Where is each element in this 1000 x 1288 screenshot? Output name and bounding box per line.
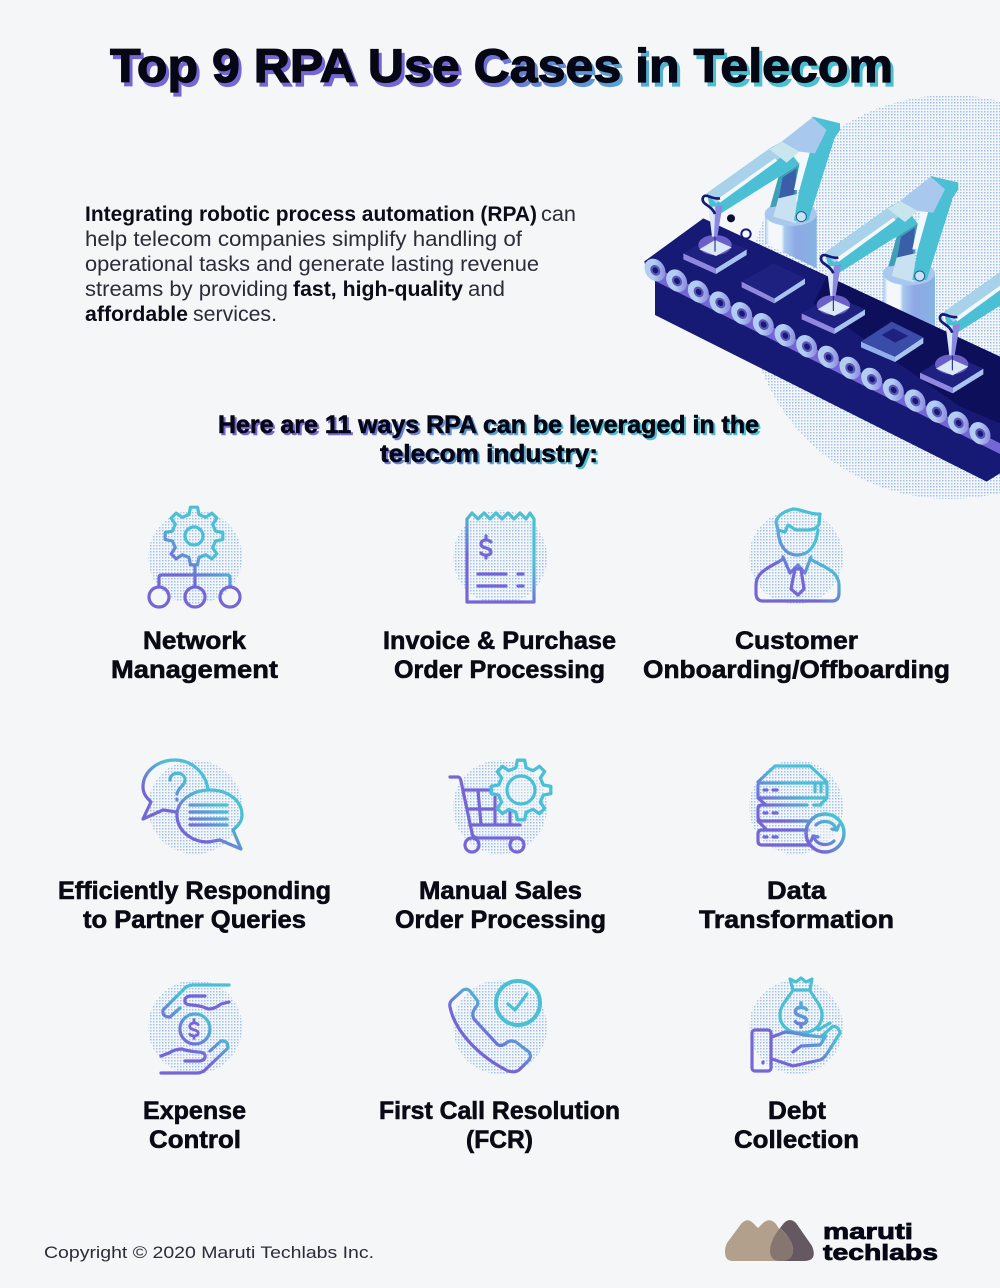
copyright: Copyright © 2020 Maruti Techlabs Inc. — [44, 1243, 374, 1262]
subheading — [218, 411, 761, 470]
label — [58, 877, 331, 934]
intro text block: can — [541, 203, 576, 226]
use case: Invoice and Purchase Order Processing — [383, 510, 616, 684]
label: Order Processing — [394, 656, 605, 684]
intro text block: Integrating robotic process automation (RPA) — [85, 203, 537, 226]
logo wordmark: techlabs — [823, 1240, 938, 1265]
title: Top 9 RPA Use Cases in Telecom — [110, 39, 893, 92]
intro text block: fast, high-quality — [293, 278, 463, 301]
logo: Maruti Techlabs — [725, 1219, 938, 1265]
label: Efficiently Responding — [58, 877, 331, 905]
illustration: robotic conveyor line — [640, 95, 1000, 499]
label — [734, 1097, 859, 1154]
title: Top 9 RPA Use Cases in Telecom — [113, 43, 896, 96]
icon: server stack — [749, 760, 844, 854]
label: Order Processing — [395, 906, 606, 934]
logo mark — [725, 1220, 814, 1261]
logo wordmark — [823, 1219, 938, 1265]
label: Control — [149, 1126, 241, 1154]
use case: First Call Resolution (FCR) — [379, 980, 620, 1154]
label — [643, 627, 950, 684]
label: Invoice & Purchase — [383, 627, 616, 655]
label — [395, 877, 606, 934]
subheading: telecom industry: — [382, 442, 600, 470]
label: First Call Resolution — [379, 1097, 620, 1125]
label: Expense — [143, 1097, 246, 1125]
icon: invoice — [453, 510, 547, 604]
use case: Manual Sales Order Processing — [395, 760, 606, 934]
dotted backdrop circle — [748, 95, 1000, 499]
label: Management — [111, 656, 279, 684]
label: Network — [143, 627, 246, 655]
use case: Customer Onboarding/Offboarding — [643, 509, 950, 684]
subheading: telecom industry: — [380, 440, 598, 468]
label: to Partner Queries — [83, 906, 306, 934]
label: Customer — [735, 627, 858, 655]
label: Onboarding/Offboarding — [643, 656, 950, 684]
icon: hands and coin — [148, 980, 242, 1074]
intro text block: operational tasks and generate lasting revenue — [85, 253, 539, 276]
label — [383, 627, 616, 684]
use case: Debt Collection — [734, 978, 859, 1154]
icon: hand and money bag — [749, 978, 843, 1074]
use case: Expense Control — [143, 980, 246, 1154]
label: (FCR) — [466, 1126, 533, 1154]
label: Manual Sales — [419, 877, 582, 905]
use case: Efficiently Responding to Partner Queries — [58, 760, 331, 934]
intro text block: help telecom companies simplify handling of — [85, 228, 522, 251]
label: Debt — [768, 1097, 827, 1125]
intro text block: streams by providing — [85, 278, 288, 301]
use case: Data Transformation — [699, 760, 894, 934]
label: Collection — [734, 1126, 859, 1154]
intro text block: services. — [193, 303, 277, 326]
label: Transformation — [699, 906, 894, 934]
intro text block: and — [468, 278, 505, 301]
subheading: Here are 11 ways RPA can be leveraged in the — [218, 411, 759, 439]
icon: chat bubbles — [143, 760, 242, 854]
logo wordmark: maruti — [823, 1219, 913, 1244]
label — [379, 1097, 620, 1154]
icon: gear network — [148, 507, 242, 607]
icon: phone and check — [450, 980, 547, 1074]
subheading: Here are 11 ways RPA can be leveraged in the — [220, 413, 761, 441]
intro text block: affordable — [85, 303, 188, 326]
label — [699, 877, 894, 934]
icon: customer — [749, 509, 843, 604]
label — [143, 1097, 246, 1154]
conveyor and robot arms — [640, 117, 1000, 482]
icon: cart and gear — [450, 760, 551, 854]
label — [111, 627, 279, 684]
intro text block — [85, 203, 576, 326]
label: Data — [767, 877, 827, 905]
use case: Network Management — [111, 507, 279, 684]
